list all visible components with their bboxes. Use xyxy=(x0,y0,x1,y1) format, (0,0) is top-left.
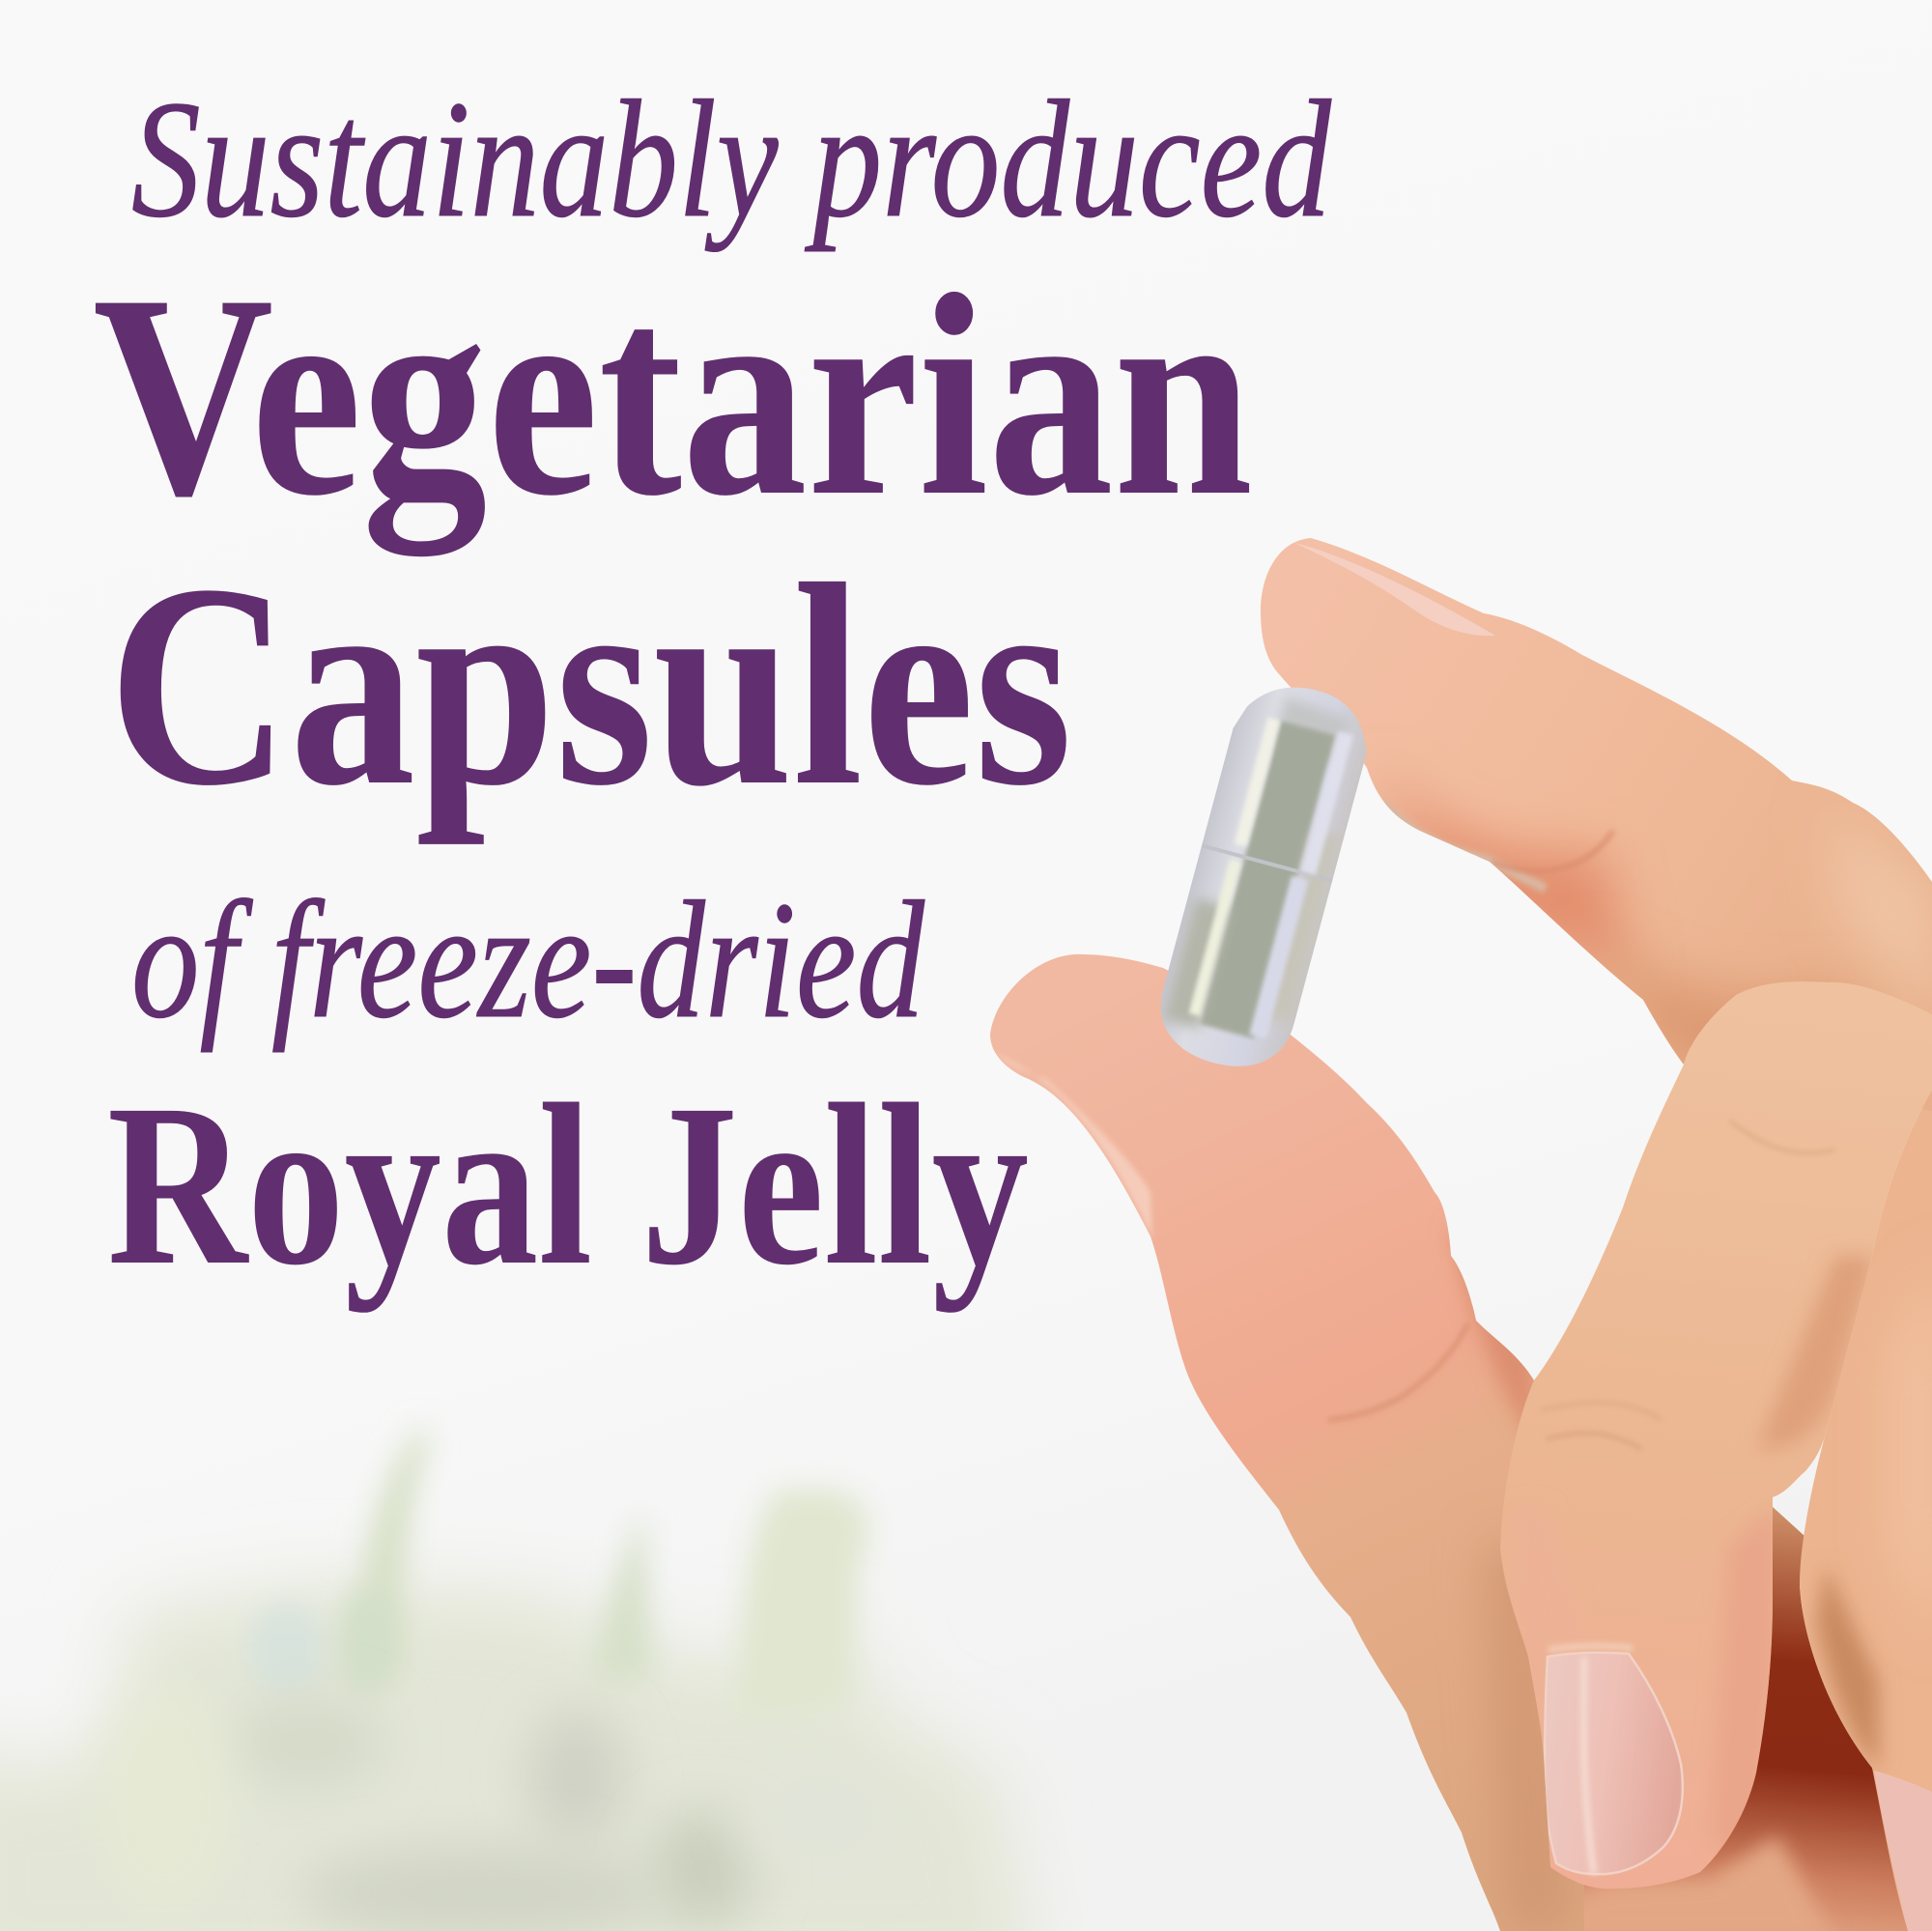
line: of freeze-dried: of freeze-dried xyxy=(131,866,925,1053)
index finger nail xyxy=(1294,543,1495,636)
heading text block xyxy=(93,66,1332,1313)
index finger xyxy=(1246,522,1932,1121)
line: Capsules: Capsules xyxy=(108,525,1072,846)
line: Sustainably produced: Sustainably produced xyxy=(131,66,1332,252)
hand holding capsule xyxy=(966,522,1932,1931)
ring finger nail xyxy=(1874,1771,1932,1931)
thumb xyxy=(1488,966,1932,1903)
blurred green plant in background xyxy=(0,1426,1038,1931)
powder core xyxy=(1200,721,1335,1038)
icon: vegetarian capsule xyxy=(1149,672,1378,1080)
line: Royal Jelly: Royal Jelly xyxy=(107,1056,1029,1313)
line: Vegetarian: Vegetarian xyxy=(93,235,1253,560)
middle finger holding capsule base xyxy=(966,927,1604,1931)
ring finger xyxy=(1800,1109,1932,1931)
palm in shadow xyxy=(1584,1507,1908,1931)
thumb nail xyxy=(1545,1653,1683,1874)
highlights xyxy=(1235,718,1280,846)
fingertip nail edge xyxy=(995,1053,1152,1239)
top dome powder xyxy=(1272,697,1351,766)
